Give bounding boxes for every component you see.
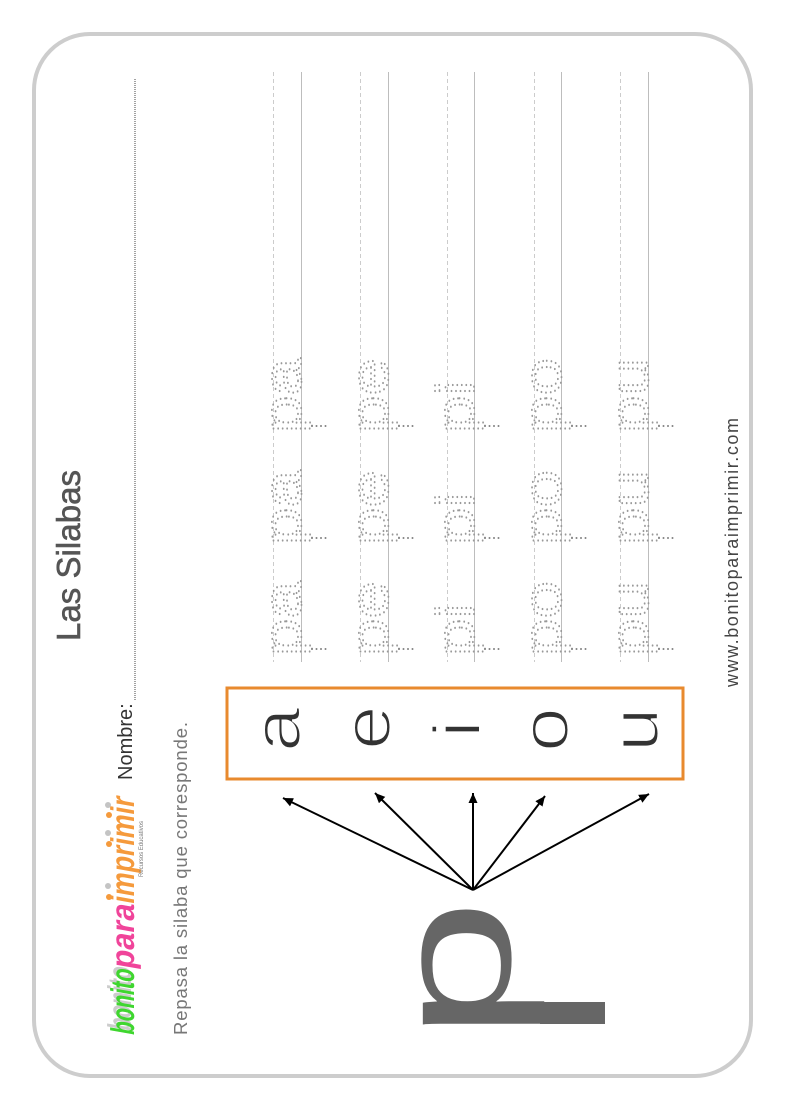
tracing row: po: po [512, 358, 572, 433]
tracing row: pi: pi [425, 380, 485, 433]
tracing row: pe: pe [339, 581, 399, 656]
logo [102, 793, 145, 1037]
vowel u: u [597, 707, 672, 752]
logo: para [105, 899, 142, 971]
tracing row: pu: pu [599, 358, 659, 433]
tracing row: pa: pa [252, 581, 312, 656]
vowel e: e [329, 705, 404, 750]
tracing row: pi [425, 72, 501, 662]
vowel i: i [419, 720, 494, 738]
logo: bonito [102, 963, 139, 1033]
tracing row: po: po [512, 470, 572, 545]
tracing row: pi: pi [425, 603, 485, 656]
tracing row: pa: pa [252, 470, 312, 545]
tracing row: pi: pi [425, 492, 485, 545]
logo: bonito [105, 965, 142, 1037]
tracing row: pu [599, 72, 675, 662]
title: Las Silabas [50, 470, 87, 641]
website url: www.bonitoparaimprimir.com [722, 418, 742, 688]
tracing row: pa [252, 72, 328, 662]
vowel box [227, 688, 683, 779]
logo: Recursos Educativos [139, 821, 145, 877]
tracing row: pu: pu [599, 581, 659, 656]
vowel o: o [507, 707, 582, 752]
tracing row: pe: pe [339, 358, 399, 433]
tracing row: pa: pa [252, 358, 312, 433]
instruction text: Repasa la silaba que corresponde. [170, 722, 191, 1035]
vowel a: a [239, 706, 314, 752]
logo: imprimir [105, 793, 142, 906]
arrows from letter to vowels [283, 793, 649, 890]
tracing row: pe [339, 72, 415, 662]
tracing row: pu: pu [599, 470, 659, 545]
tracing row: po [512, 72, 588, 662]
big letter p: p [360, 899, 545, 1041]
tracing row: po: po [512, 581, 572, 656]
name field: Nombre: [115, 703, 137, 780]
tracing row: pe: pe [339, 470, 399, 545]
